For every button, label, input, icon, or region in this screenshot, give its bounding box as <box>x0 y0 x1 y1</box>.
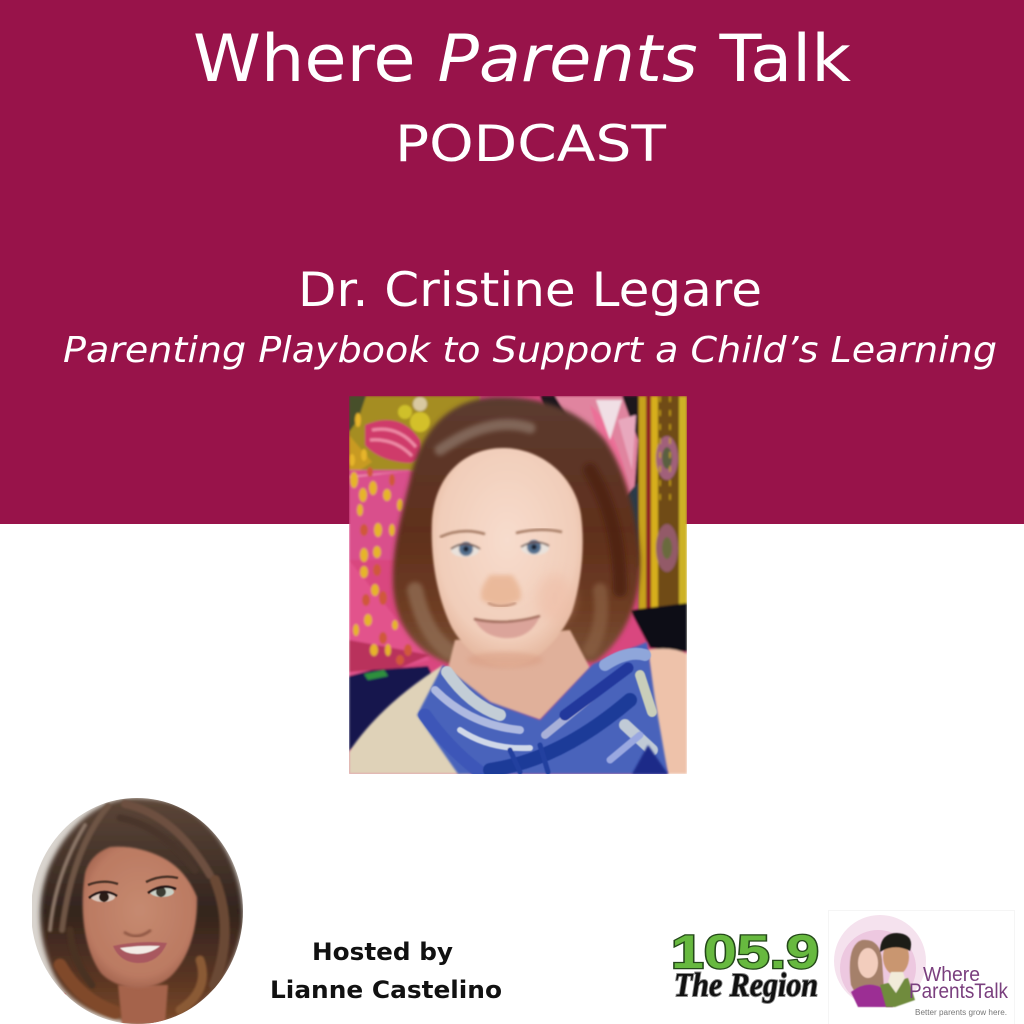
fabric background <box>349 396 687 774</box>
maroon header panel <box>0 0 1024 524</box>
flat left edge of host photo <box>0 790 32 1024</box>
eyes <box>451 540 549 557</box>
host eyes <box>88 877 178 902</box>
host nose <box>124 930 151 936</box>
yellow dots pattern <box>349 413 403 656</box>
face <box>432 448 583 667</box>
logo: Where Parents Talk: Better parents grow here. <box>915 1008 1007 1017</box>
chin shadow <box>467 652 543 668</box>
host mouth <box>113 942 167 963</box>
guest name: Dr. Cristine Legare <box>298 263 762 318</box>
logo: Where Parents Talk <box>828 910 1014 1024</box>
episode title: Parenting Playbook to Support a Child’s Learning <box>63 330 997 371</box>
guest photo <box>349 396 687 774</box>
logo wordmark: Where <box>923 964 980 986</box>
host credit <box>270 938 502 1004</box>
logo: 105.9 The Region: 105.9 <box>671 925 819 978</box>
logo: Where Parents Talk: ParentsTalk <box>909 980 1008 1003</box>
host credit: Lianne Castelino <box>270 976 502 1004</box>
cheek shading <box>537 574 573 622</box>
title: Where Parents Talk <box>193 22 851 97</box>
scarf <box>417 642 668 774</box>
dark navy lower background <box>349 666 440 752</box>
host neck <box>118 985 168 1024</box>
logo: 105.9 The Region: The Region <box>674 967 818 1004</box>
logo man <box>880 933 915 1007</box>
eyebrows <box>440 530 562 537</box>
host face <box>83 847 197 988</box>
logo circles <box>834 915 926 1007</box>
hair <box>393 397 640 664</box>
host hair <box>40 798 243 1024</box>
hair highlights <box>415 424 620 652</box>
subtitle: podcast: PODCAST <box>395 115 667 173</box>
logo: 105.9 The Region <box>671 925 819 1004</box>
cream top <box>349 665 470 774</box>
logo woman <box>850 940 893 1007</box>
host hair strands <box>50 804 225 1012</box>
neck <box>447 630 590 720</box>
host photo <box>30 796 246 1024</box>
host credit: Hosted by <box>312 938 453 966</box>
mouth <box>474 616 540 638</box>
nose <box>481 575 521 606</box>
